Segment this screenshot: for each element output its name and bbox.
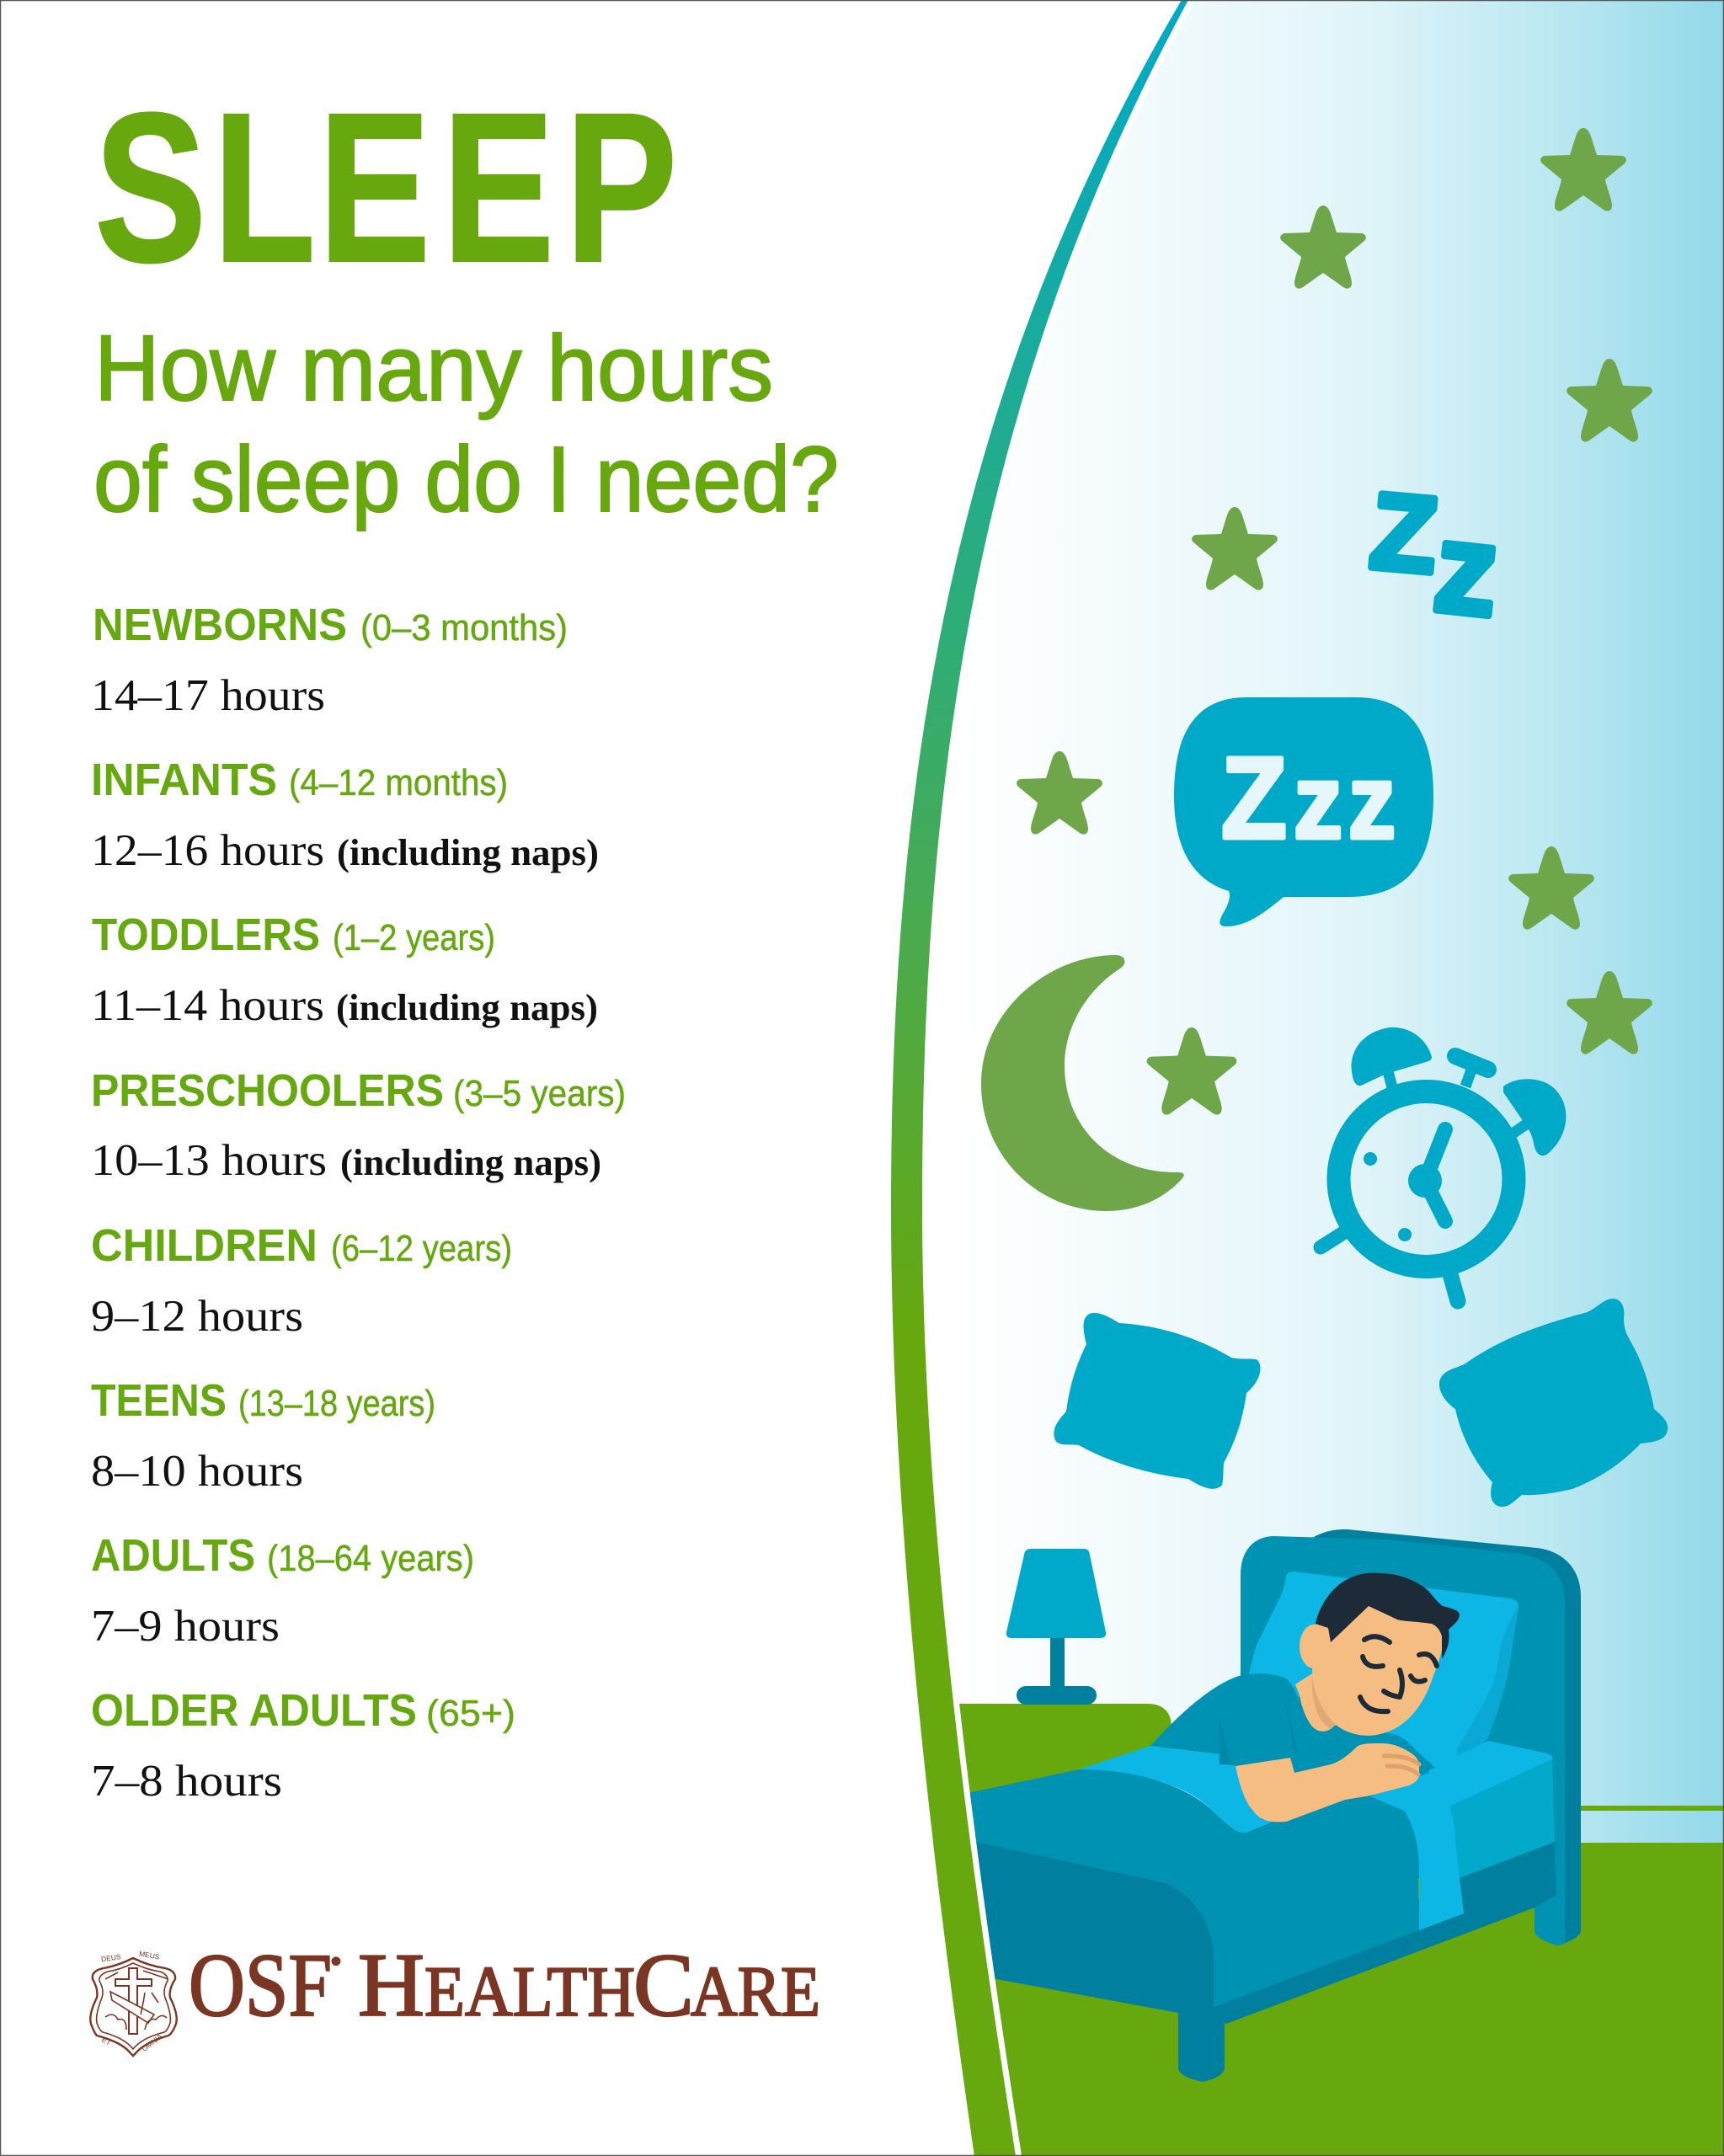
icon: bedside lamp xyxy=(1006,1549,1106,1705)
list: older adults: 7–8 hours xyxy=(91,1757,282,1806)
sleeve xyxy=(1219,1684,1290,1765)
neck xyxy=(1295,1673,1339,1732)
list: infants: (4–12 months) xyxy=(289,762,508,803)
icon: star 8 xyxy=(1147,1027,1236,1115)
list: adults: (18–64 years) xyxy=(267,1538,474,1579)
bed pillow xyxy=(1249,1572,1519,1777)
icon: speech bubble with Zzz: z xyxy=(1294,744,1342,861)
illustration: sleeping person in bed xyxy=(960,1529,1581,2082)
icon: crescent moon xyxy=(981,955,1184,1211)
icon: star 5 xyxy=(1017,751,1102,835)
icon: star 4 xyxy=(1192,507,1278,590)
icon: crest: ET xyxy=(100,2035,113,2047)
blanket front xyxy=(969,1840,1246,2013)
neck shadow xyxy=(1312,1676,1337,1729)
icon: right pillow xyxy=(1439,1299,1668,1507)
list: newborns xyxy=(91,600,568,720)
curved gradient band xyxy=(891,0,1188,2156)
headboard back xyxy=(1310,1529,1581,1945)
list: teens: TEENS xyxy=(91,1375,227,1426)
list: preschoolers: (including naps) xyxy=(340,1142,601,1183)
list: toddlers: (including naps) xyxy=(336,987,598,1028)
subtitle xyxy=(93,317,839,531)
subtitle: How many hours xyxy=(94,317,773,420)
list: toddlers: 11–14 hours xyxy=(91,981,324,1030)
blanket top xyxy=(960,1769,1419,2007)
list: preschoolers: PRESCHOOLERS xyxy=(91,1065,444,1116)
list: teens: 8–10 hours xyxy=(91,1447,303,1496)
nightstand xyxy=(952,1704,1172,1802)
list: older adults xyxy=(91,1685,515,1806)
list: toddlers: TODDLERS xyxy=(92,910,320,960)
headboard front xyxy=(1241,1536,1565,1945)
sleeve seam xyxy=(1284,1695,1298,1752)
face details xyxy=(1360,1636,1437,1711)
list: older adults: (65+) xyxy=(426,1693,515,1734)
white stripe beside curve xyxy=(922,0,1188,2156)
icon: floating Zz letters xyxy=(1366,471,1505,643)
list: preschoolers: 10–13 hours xyxy=(91,1136,327,1185)
icon: speech bubble with Zzz: Z xyxy=(1221,734,1287,863)
icon: crest xyxy=(90,1949,177,2056)
logo: OSF HealthCare: C xyxy=(633,1936,694,2036)
icon: alarm clock xyxy=(1321,1027,1566,1301)
icon: star 3 xyxy=(1567,359,1652,442)
list: adults: 7–9 hours xyxy=(91,1602,280,1651)
list: preschoolers: (3–5 years) xyxy=(453,1073,626,1114)
list: newborns: NEWBORNS xyxy=(93,600,347,650)
floor xyxy=(926,1843,1724,2156)
mattress side xyxy=(1444,1758,1555,1882)
icon: left pillow xyxy=(1054,1313,1261,1489)
logo: OSF HealthCare: EALTH xyxy=(424,1952,635,2031)
list: preschoolers xyxy=(91,1065,626,1185)
list: infants: INFANTS xyxy=(91,755,277,805)
icon: crest: DEUS xyxy=(100,1952,122,1963)
list: toddlers: (1–2 years) xyxy=(333,917,495,958)
arm xyxy=(1236,1743,1419,1822)
list: children: CHILDREN xyxy=(91,1220,318,1271)
icon: speech bubble with Zzz: z xyxy=(1348,744,1396,861)
icon: star 1 xyxy=(1540,128,1626,211)
list: newborns: 14–17 hours xyxy=(91,671,325,720)
list: adults xyxy=(91,1530,474,1651)
logo: OSF HealthCare: H xyxy=(358,1936,424,2036)
icon: star 2 xyxy=(1280,205,1366,289)
logo: OSF HealthCare: ® xyxy=(332,1955,340,1967)
icon: speech bubble with Zzz xyxy=(1174,697,1433,926)
sheet strip xyxy=(1370,1780,1464,1930)
list: toddlers xyxy=(91,910,598,1030)
list: teens xyxy=(91,1375,435,1496)
logo: OSF HealthCare xyxy=(90,1936,820,2056)
list: infants: (including naps) xyxy=(337,832,599,873)
sleeve edge xyxy=(1219,1716,1231,1764)
list: newborns: (0–3 months) xyxy=(360,607,568,648)
front bed leg xyxy=(1178,2009,1225,2082)
list: infants: 12–16 hours xyxy=(91,826,324,875)
bed frame side xyxy=(1214,1842,1556,2024)
list: teens: (13–18 years) xyxy=(238,1383,435,1424)
bed pillow fold xyxy=(1457,1606,1519,1775)
list: children: 9–12 hours xyxy=(91,1292,303,1341)
icon: star 6 xyxy=(1508,846,1594,930)
wordmark: OSF xyxy=(189,1936,332,2036)
subtitle: of sleep do I need? xyxy=(93,428,839,531)
icon: crest: OMNIA xyxy=(140,2032,164,2053)
icon: star 7 xyxy=(1567,971,1652,1054)
icon: floating Zz letters: Z xyxy=(1366,471,1442,596)
turned-down sheet xyxy=(1079,1746,1273,1833)
head xyxy=(1312,1596,1444,1736)
list: older adults: OLDER ADULTS xyxy=(91,1685,417,1736)
logo: OSF HealthCare: ARE xyxy=(691,1952,820,2031)
hair xyxy=(1316,1573,1460,1659)
list: infants xyxy=(91,755,599,875)
title: SLEEP xyxy=(94,70,677,307)
mattress top xyxy=(1411,1741,1552,1806)
list: children: (6–12 years) xyxy=(331,1228,512,1269)
baseboard line xyxy=(1575,1806,1724,1811)
icon: floating Zz letters: z xyxy=(1428,495,1505,643)
shirt xyxy=(1150,1673,1429,1790)
panel: night sky background xyxy=(884,0,1724,2156)
panel: white text area xyxy=(0,0,1182,2156)
list: children xyxy=(91,1220,512,1341)
ear xyxy=(1300,1625,1328,1668)
list: adults: ADULTS xyxy=(91,1530,255,1581)
fingers xyxy=(1384,1756,1419,1774)
icon: crest: MEUS xyxy=(138,1949,161,1961)
